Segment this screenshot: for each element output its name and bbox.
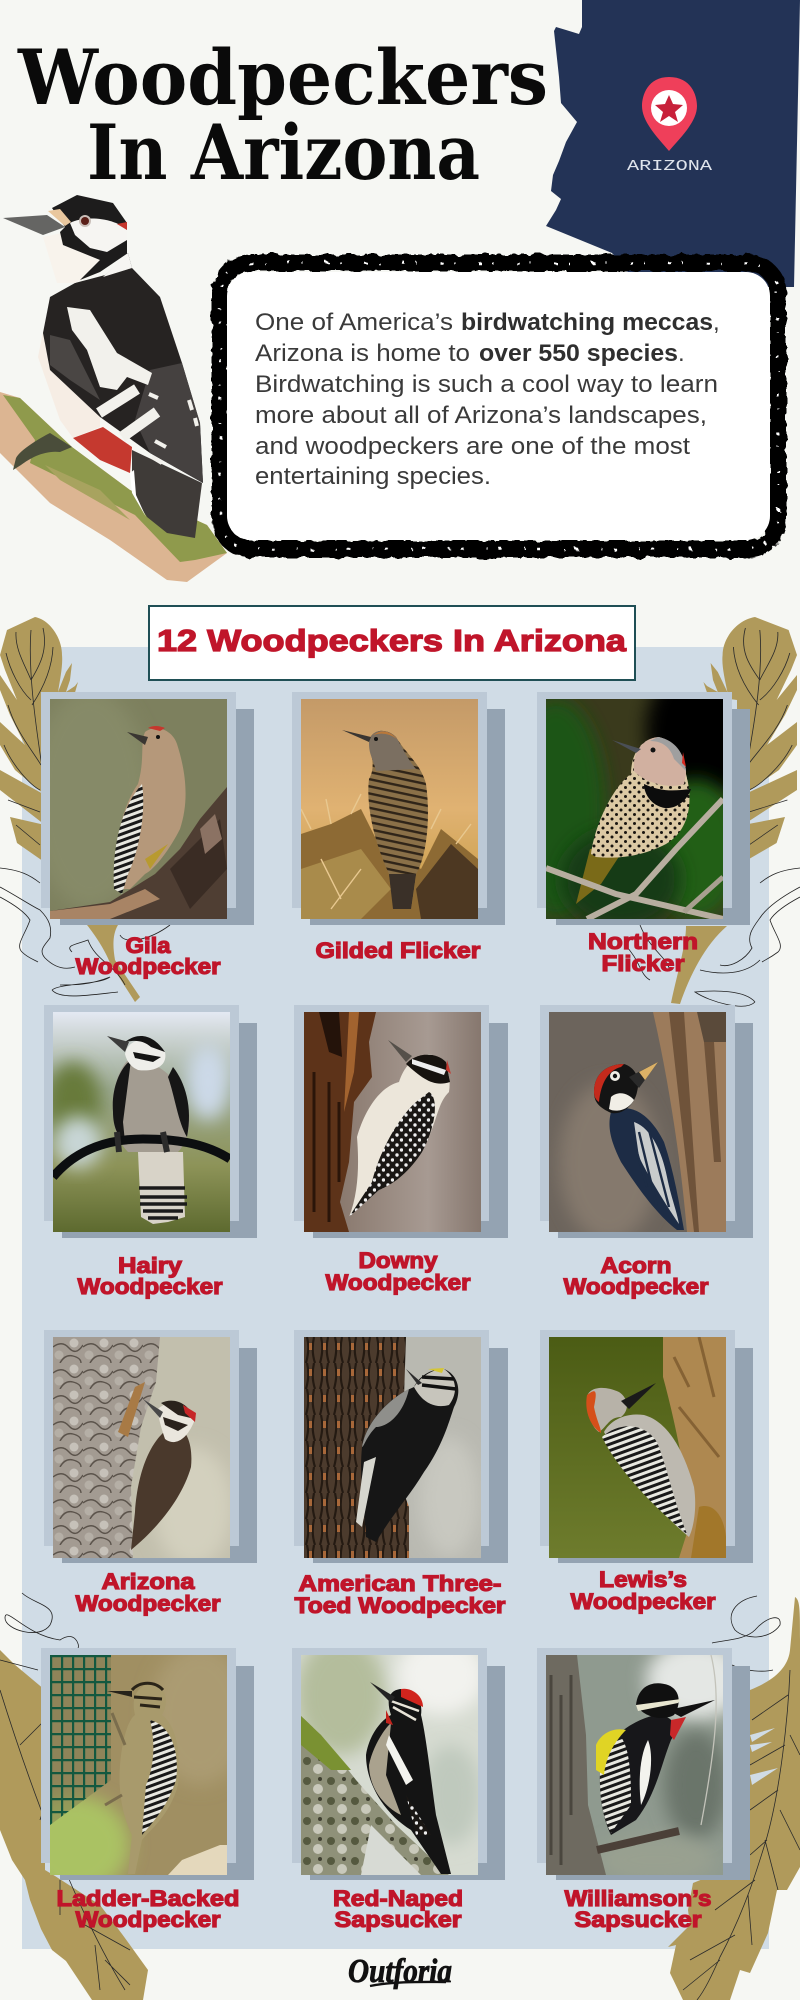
- red undertail: [73, 427, 132, 473]
- label: Downy Woodpecker: Woodpecker: [326, 1270, 471, 1295]
- icon: map pin: [642, 77, 697, 151]
- label: Arizona Woodpecker: [76, 1569, 221, 1616]
- beak: [3, 215, 65, 235]
- label: Northern Flicker: Flicker: [602, 951, 685, 976]
- logo: Outforia: Outforia: [348, 1953, 452, 1990]
- intro paragraph: .: [678, 340, 685, 367]
- panel: Acorn Woodpecker card: [540, 1005, 753, 1242]
- panel: Williamson's Sapsucker card: [537, 1640, 750, 1885]
- label: Hairy Woodpecker: Woodpecker: [78, 1274, 223, 1299]
- feather: top left: [0, 617, 78, 866]
- label: Red-Naped Sapsucker: Red-Naped: [333, 1886, 463, 1911]
- label: Acorn Woodpecker: [564, 1253, 709, 1299]
- photo: Gilded Flicker: [301, 699, 478, 919]
- intro paragraph: more about all of Arizona’s landscapes,: [255, 402, 707, 429]
- label: Gila Woodpecker: Gila: [126, 933, 171, 958]
- intro paragraph: Birdwatching is such a cool way to learn: [255, 371, 718, 398]
- label: Williamson's Sapsucker: Williamson’s: [564, 1886, 712, 1911]
- heading: 12 Woodpeckers In Arizona: [149, 606, 635, 680]
- label: Downy Woodpecker: Downy: [358, 1248, 438, 1273]
- photo: Lewis's Woodpecker: [549, 1337, 726, 1558]
- intro paragraph: birdwatching meccas: [461, 309, 713, 336]
- neck and cheek: [43, 233, 100, 283]
- white shoulder: [67, 307, 152, 390]
- panel: Northern Flicker card: [506, 659, 766, 929]
- heading: 12 Woodpeckers In Arizona: 12 Woodpeckers In Arizona: [157, 623, 627, 658]
- label: Lewis's Woodpecker: Woodpecker: [570, 1589, 716, 1614]
- label: Arizona Woodpecker: Arizona: [102, 1569, 195, 1594]
- label: Lewis's Woodpecker: Lewis’s: [599, 1567, 687, 1592]
- photo: Ladder-Backed Woodpecker: [50, 1655, 227, 1875]
- map label: ARIZONA: [627, 158, 712, 175]
- label: Hairy Woodpecker: Hairy: [118, 1253, 183, 1278]
- panel: Hairy Woodpecker card: [44, 1005, 257, 1238]
- label: American Three-Toed Woodpecker: [294, 1571, 506, 1618]
- label: Williamson's Sapsucker: [564, 1886, 712, 1932]
- panel: Lewis's Woodpecker card: [540, 1330, 753, 1563]
- branch: [0, 392, 227, 582]
- photo: Hairy Woodpecker: [53, 1012, 230, 1232]
- label: Ladder-Backed Woodpecker: Woodpecker: [76, 1907, 221, 1932]
- white wing bars: [99, 389, 157, 437]
- label: Red-Naped Sapsucker: [333, 1886, 463, 1932]
- label: Ladder-Backed Woodpecker: Ladder-Backed: [56, 1886, 240, 1911]
- foot: [13, 433, 72, 470]
- feather: bottom right: [668, 1597, 800, 2000]
- decorative swirls left: [0, 868, 800, 1671]
- label: Hairy Woodpecker: [78, 1253, 223, 1299]
- photo: Gila Woodpecker: [50, 699, 227, 919]
- intro paragraph: entertaining species.: [255, 463, 491, 490]
- panel: Downy Woodpecker card: [294, 1005, 508, 1238]
- panel: species background: [22, 647, 769, 1949]
- label: Lewis's Woodpecker: [570, 1567, 716, 1614]
- label: Acorn Woodpecker: Acorn: [600, 1253, 672, 1278]
- label: American Three-Toed Woodpecker: American Three-: [298, 1571, 502, 1596]
- title: [17, 33, 548, 197]
- photo: American Three-Toed Woodpecker: [304, 1337, 481, 1558]
- feather: bottom left: [0, 1650, 148, 2000]
- title: In Arizona: [87, 108, 480, 197]
- label: Ladder-Backed Woodpecker: [56, 1886, 240, 1932]
- intro paragraph: ,: [713, 309, 720, 336]
- photo: Downy Woodpecker: [304, 1012, 481, 1232]
- label: Arizona Woodpecker: Woodpecker: [76, 1591, 221, 1616]
- panel: Ladder-Backed Woodpecker card: [20, 1645, 254, 1895]
- text box with rough border: [220, 263, 778, 549]
- illustration: woodpecker on branch: [0, 195, 227, 582]
- panel: Gila Woodpecker card: [30, 689, 254, 925]
- panel: Arizona Woodpecker card: [44, 1330, 257, 1567]
- label: Gila Woodpecker: Woodpecker: [76, 954, 221, 979]
- photo: Red-Naped Sapsucker: [301, 1655, 478, 1875]
- panel: Red-Naped Sapsucker card: [292, 1635, 505, 1880]
- map of Arizona: [546, 0, 800, 287]
- photo: Northern Flicker: [546, 699, 723, 919]
- panel: American Three-Toed Woodpecker card: [294, 1330, 508, 1563]
- intro paragraph: and woodpeckers are one of the most: [255, 433, 690, 460]
- feather stem: top right: [671, 926, 727, 1004]
- back and wing: [43, 268, 203, 483]
- panel: Gilded Flicker card: [292, 692, 505, 925]
- intro paragraph: One of America’s: [255, 309, 453, 336]
- feather: top right: [703, 617, 797, 866]
- label: Red-Naped Sapsucker: Sapsucker: [334, 1907, 462, 1932]
- intro paragraph: Arizona is home to: [255, 340, 470, 367]
- label: Gilded Flicker: Gilded Flicker: [316, 938, 481, 963]
- intro paragraph: [255, 309, 720, 490]
- label: Downy Woodpecker: [326, 1248, 471, 1295]
- belly: [38, 297, 100, 438]
- label: Northern Flicker: [588, 929, 698, 976]
- photo: Acorn Woodpecker: [549, 1012, 726, 1232]
- label: Williamson's Sapsucker: Sapsucker: [574, 1907, 702, 1932]
- photo: Williamson's Sapsucker: [546, 1655, 723, 1875]
- title: Woodpeckers: [17, 33, 548, 122]
- photo: Arizona Woodpecker: [53, 1337, 230, 1558]
- label: Acorn Woodpecker: Woodpecker: [564, 1274, 709, 1299]
- feather stem: top left: [87, 925, 140, 1002]
- tail: [132, 450, 202, 538]
- label: Northern Flicker: Northern: [588, 929, 698, 954]
- label: Gila Woodpecker: [76, 933, 221, 979]
- intro paragraph: over 550 species: [479, 340, 678, 367]
- label: American Three-Toed Woodpecker: Toed Woodpecker: [294, 1593, 506, 1618]
